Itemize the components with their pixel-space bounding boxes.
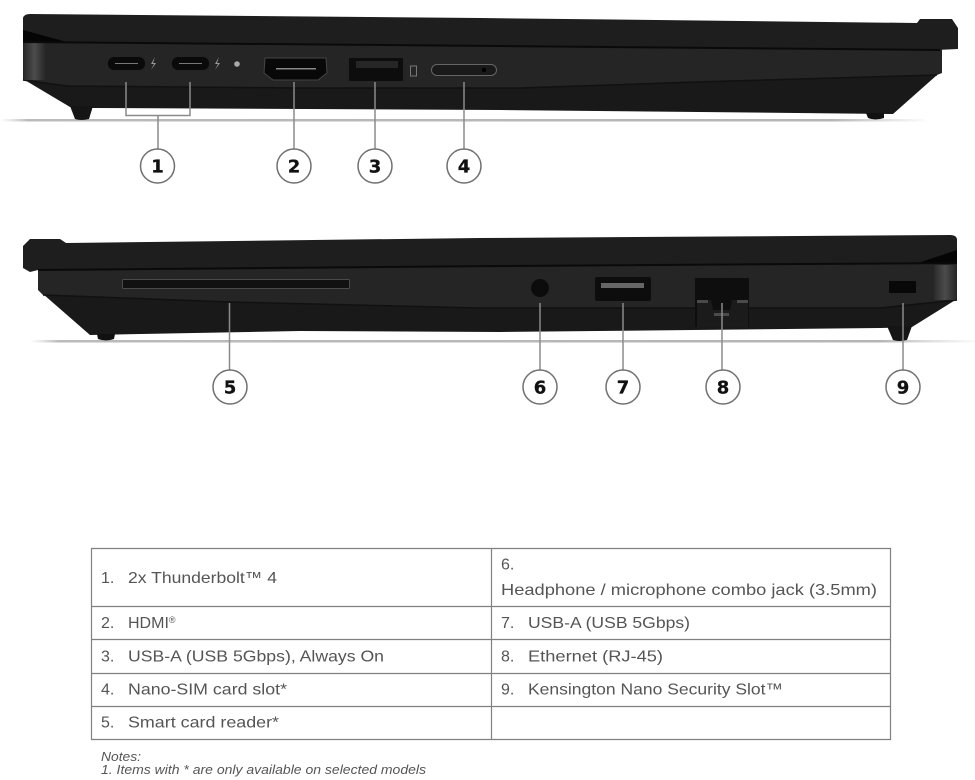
spec table [92, 548, 890, 740]
wedge base [23, 75, 937, 114]
row 3 right: Ethernet (RJ-45) [528, 648, 663, 666]
row 4 right: Kensington Nano Security Slot™ [528, 682, 783, 698]
wedge base [43, 294, 957, 335]
callout 3: 3 [369, 156, 381, 178]
callout 7 [606, 303, 640, 404]
thunderbolt icon A [151, 57, 156, 70]
right foot [866, 113, 884, 120]
row 1 right: Headphone / microphone combo jack (3.5mm) [501, 582, 877, 599]
row 1 right [501, 556, 877, 599]
seam shadow [43, 295, 957, 308]
row 4 left: 4. [101, 682, 114, 698]
kensington lock slot [889, 281, 916, 293]
base body [23, 41, 942, 88]
callout 9: 9 [897, 378, 909, 398]
usb-c port B [172, 57, 209, 70]
notes: Notes: [101, 749, 141, 764]
callout 6: 6 [534, 378, 546, 398]
row 4 left: Nano-SIM card slot* [128, 682, 287, 698]
callout 5: 5 [224, 378, 236, 398]
callout 2: 2 [288, 156, 300, 178]
thunderbolt icon B [215, 57, 220, 70]
row 2 left: ® [169, 615, 176, 625]
usb-a always on port [349, 58, 403, 81]
sim slot [432, 64, 496, 76]
laptop: left side view [23, 14, 958, 120]
callout 9 [886, 303, 920, 404]
usb-a port [595, 277, 651, 301]
callout 4 [447, 82, 481, 183]
row 5 left: 5. [101, 714, 114, 732]
notes: 1. Items with * are only available on selected models [101, 762, 427, 777]
smart card slot [122, 280, 350, 288]
callout 8 [706, 303, 740, 404]
callout 2 [277, 82, 311, 183]
ethernet port [695, 278, 749, 327]
lit edge [934, 265, 956, 300]
lit edge [24, 43, 45, 80]
callout 4: 4 [458, 156, 470, 178]
row 2 right: 7. [501, 615, 514, 632]
row 3 right: 8. [501, 648, 514, 666]
callout 7: 7 [617, 378, 629, 398]
row 3 left: USB-A (USB 5Gbps), Always On [128, 648, 384, 666]
floor shadow lines [0, 119, 975, 342]
row 2 left: HDMI [128, 615, 169, 632]
row 1 left: 1. [101, 570, 114, 587]
callout 5 [213, 303, 247, 404]
seam shadow [23, 75, 937, 88]
left foot [70, 106, 93, 120]
row 3 left: 3. [101, 648, 114, 666]
laptop: right side view [23, 235, 957, 341]
notes [101, 749, 427, 777]
lid [23, 14, 958, 50]
battery icon [410, 66, 416, 76]
right foot [887, 326, 912, 341]
row 1 left: 2x Thunderbolt™ 4 [128, 570, 277, 587]
row 4 right: 9. [501, 682, 514, 698]
status led [234, 61, 240, 67]
row 5 left: Smart card reader* [128, 714, 279, 732]
hdmi port [264, 58, 327, 80]
row 1 right: 6. [501, 556, 514, 574]
lid [23, 235, 957, 272]
callout 1: 1 [151, 156, 164, 178]
callout 1 [126, 82, 190, 183]
base body [38, 262, 957, 308]
callout 6 [523, 303, 557, 404]
row 2 left: 2. [101, 615, 114, 632]
left foot [97, 334, 115, 340]
usb-c port A [108, 57, 145, 70]
row 2 right: USB-A (USB 5Gbps) [528, 615, 690, 632]
callout 8: 8 [717, 378, 729, 398]
callout 3 [358, 82, 392, 183]
table grid [92, 548, 890, 740]
audio jack [531, 279, 549, 297]
